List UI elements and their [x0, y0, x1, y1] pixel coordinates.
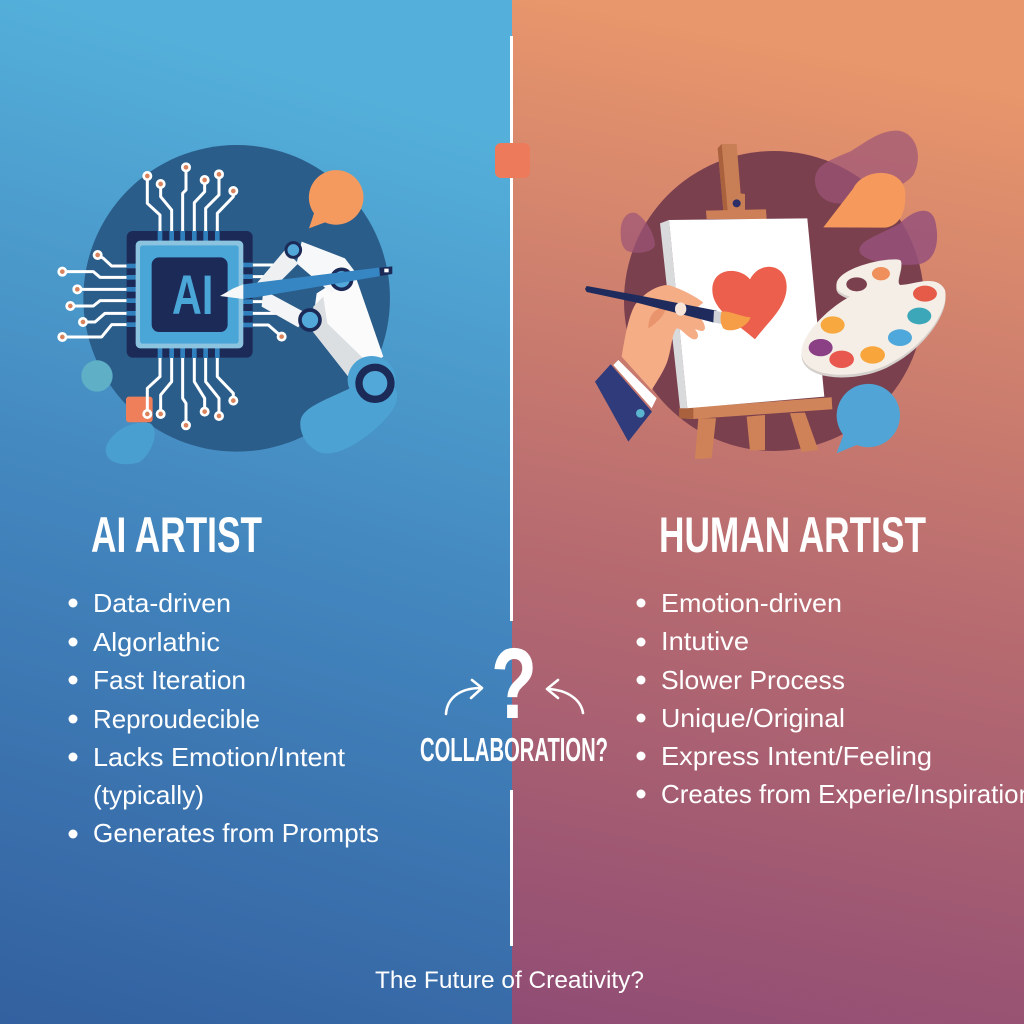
icon: orange square — [126, 397, 153, 422]
icon: orange speech bubble — [309, 170, 364, 228]
icon: robot arm — [257, 242, 396, 404]
list: human artist traits: Express Intent/Feeling — [661, 741, 932, 771]
icon: robot paintbrush — [220, 266, 392, 299]
list: human artist traits — [636, 588, 1024, 809]
center divider — [510, 36, 513, 946]
list: human artist traits: Intutive — [661, 626, 749, 656]
panel: AI artist background — [0, 0, 512, 1024]
icon: purple blob right — [859, 211, 937, 265]
list: human artist traits: Creates from Experie/Inspiration — [661, 779, 1024, 809]
icon: easel — [679, 144, 832, 459]
icon: blue blob — [106, 423, 155, 464]
list: human artist traits: Emotion-driven — [661, 588, 842, 618]
icon: purple blob left — [621, 213, 655, 253]
arrow: right arrow pointing to question mark — [547, 680, 583, 713]
list: AI artist traits: Lacks Emotion/Intent — [93, 742, 346, 772]
list: AI artist traits: Fast Iteration — [93, 665, 246, 695]
list: AI artist traits: (typically) — [93, 780, 204, 810]
icon: AI chip: AI — [172, 263, 213, 326]
icon: hand with paintbrush — [585, 285, 751, 442]
list: human artist traits: Slower Process — [661, 665, 845, 695]
label: collaboration: COLLABORATION? — [420, 731, 608, 768]
icon: question mark: ? — [491, 628, 537, 740]
icon: blue blob under robot — [300, 382, 397, 454]
icon: orange drop — [823, 173, 905, 228]
list: AI artist traits: Algorlathic — [93, 627, 220, 657]
icon: teal circle — [81, 360, 113, 392]
list: AI artist traits: Data-driven — [93, 588, 231, 618]
backdrop circle — [83, 145, 390, 452]
illustration: human hand painting on easel — [585, 131, 946, 459]
icon: heart — [712, 267, 787, 339]
heading: AI ARTIST: AI ARTIST — [91, 507, 262, 563]
illustration: AI chip with robot arm — [59, 145, 397, 464]
icon: palette — [802, 259, 946, 377]
backdrop circle — [624, 151, 924, 451]
icon: purple blob top — [815, 131, 918, 204]
footer caption: The Future of Creativity? — [375, 967, 644, 994]
icon: divider square — [495, 143, 530, 178]
list: AI artist traits — [68, 588, 379, 848]
icon: circuit traces — [62, 167, 282, 425]
arrow: left arrow pointing to question mark — [446, 680, 482, 714]
icon: blue speech bubble — [837, 384, 900, 453]
list: AI artist traits: Generates from Prompts — [93, 818, 379, 848]
panel: human artist background — [512, 0, 1024, 1024]
icon: circuit nodes — [59, 164, 285, 429]
list: AI artist traits: Reproudecible — [93, 704, 260, 734]
list: human artist traits: Unique/Original — [661, 703, 845, 733]
icon: AI chip — [127, 231, 253, 358]
icon: canvas — [660, 218, 824, 408]
